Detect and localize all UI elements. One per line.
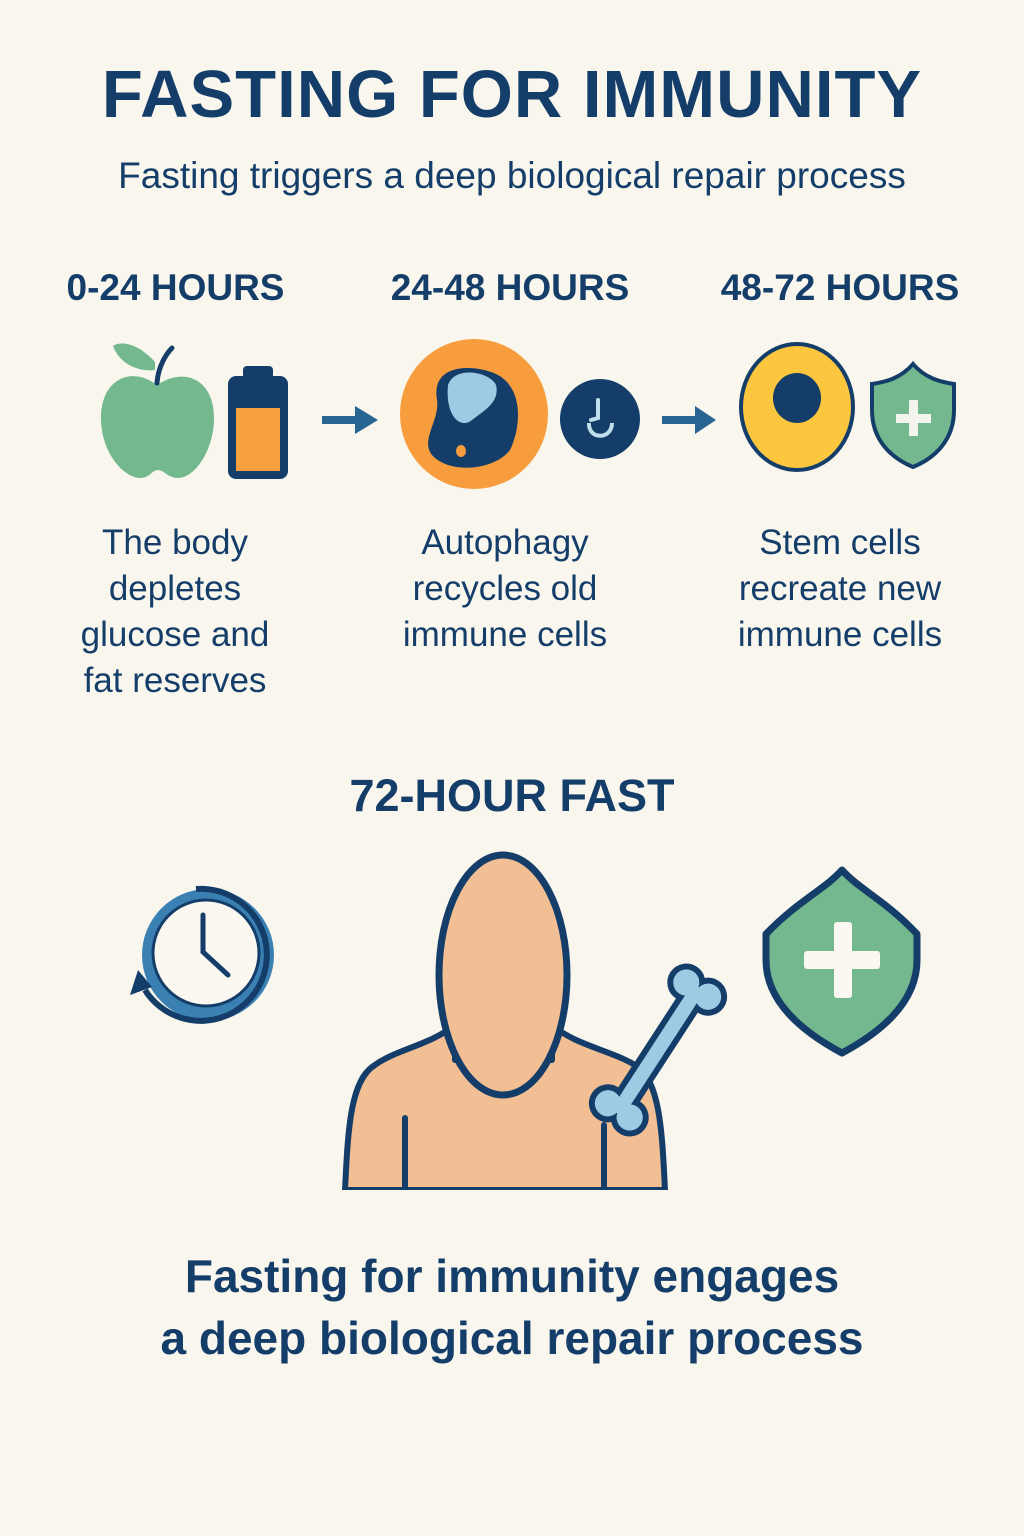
- text: stage 1: fat reserves: [84, 661, 266, 700]
- heading: 48-72: 48-72 HOURS: [721, 267, 959, 308]
- text: stage 2: Autophagy: [421, 523, 589, 562]
- icon: clock: [130, 889, 274, 1021]
- heading: 24-48: 24-48 HOURS: [391, 267, 629, 308]
- text: stage 3: Stem cells: [759, 523, 921, 562]
- text: stage 2: recycles old: [413, 569, 597, 608]
- text: stage 1: depletes: [109, 569, 241, 608]
- icon: small recycle cell: [560, 379, 640, 459]
- icon: apple: [101, 343, 214, 478]
- closing text: a deep biological repair process: [160, 1312, 864, 1364]
- subtitle: Fasting triggers a deep biological repair process: [118, 155, 906, 196]
- heading: 72-hour fast: 72-HOUR FAST: [349, 770, 675, 821]
- arrow 1: [322, 406, 378, 434]
- icon: stem cell: [741, 344, 853, 470]
- text: stage 2: immune cells: [403, 615, 607, 654]
- icon: small shield: [872, 364, 954, 467]
- icon: battery: [228, 366, 288, 479]
- icon: autophagy cell: [400, 339, 548, 489]
- text: stage 1: The body: [102, 523, 248, 562]
- text: stage 1: glucose and: [81, 615, 269, 654]
- text: stage 3: [738, 523, 942, 654]
- heading: 0-24: 0-24 HOURS: [67, 267, 284, 308]
- icon: bone: [586, 960, 730, 1140]
- text: stage 3: immune cells: [738, 615, 942, 654]
- arrow 2: [662, 406, 716, 434]
- icon: big shield: [766, 870, 917, 1053]
- text: stage 2: [403, 523, 607, 654]
- illustration: person: [340, 855, 670, 1196]
- text: stage 3: recreate new: [739, 569, 941, 608]
- closing text: Fasting for immunity engages: [185, 1250, 839, 1302]
- title: FASTING FOR IMMUNITY: [102, 57, 922, 132]
- closing text: [160, 1250, 864, 1364]
- text: stage 1: [81, 523, 269, 700]
